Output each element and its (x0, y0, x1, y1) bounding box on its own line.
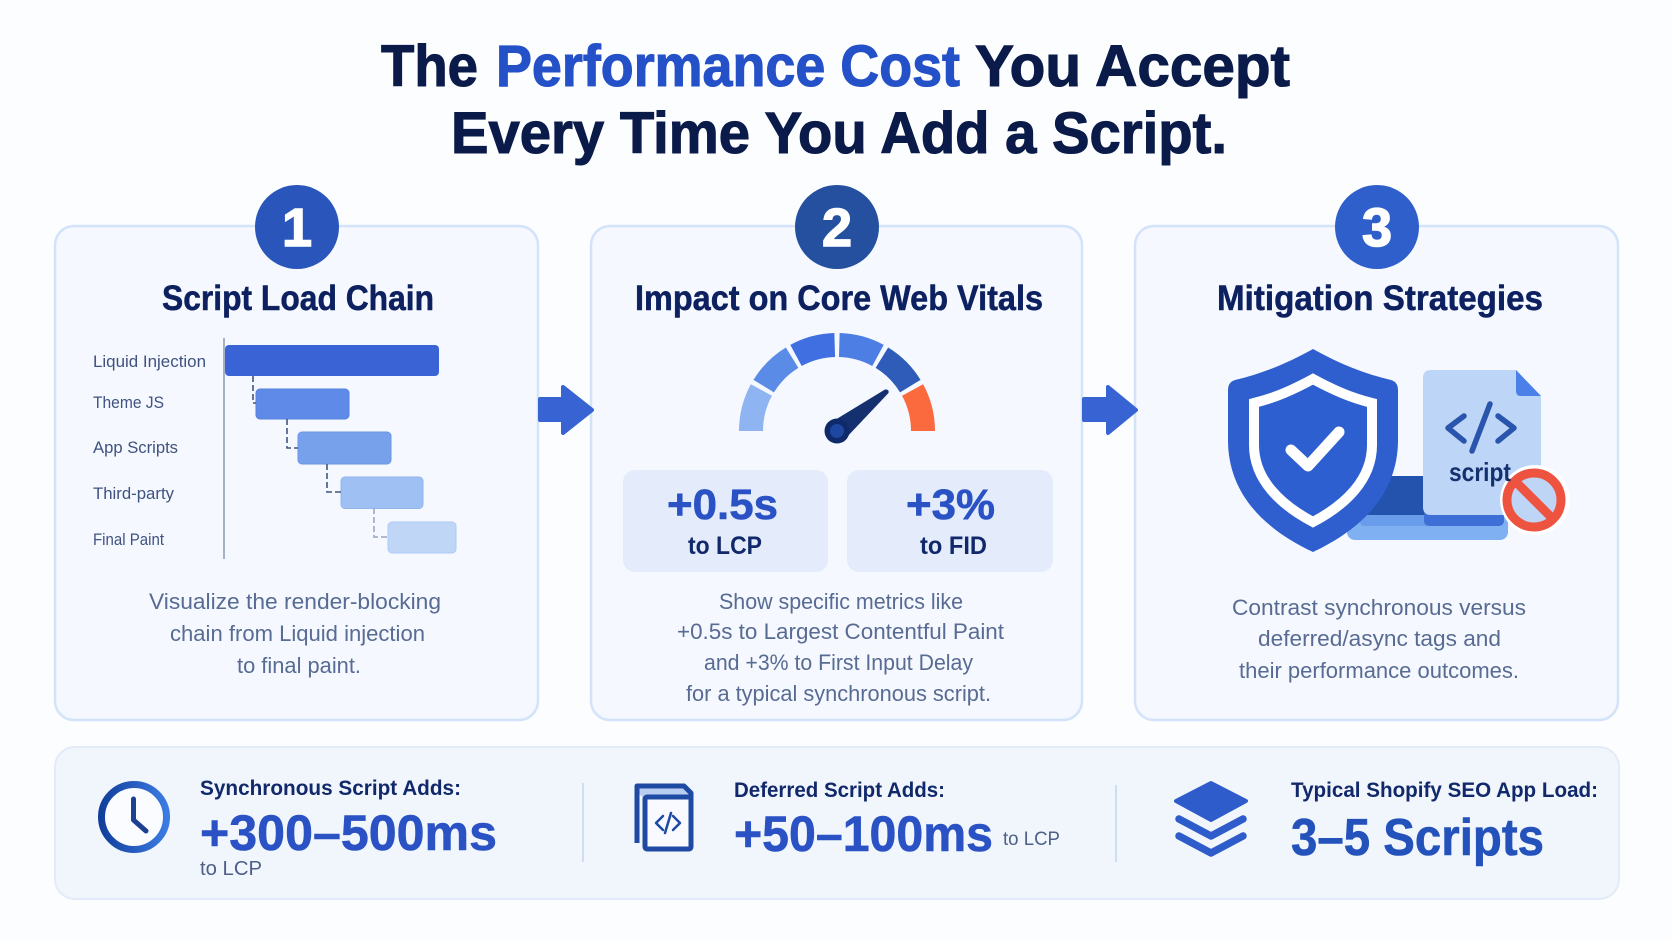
stat: synchronous script (102, 777, 497, 880)
label: script: script (1449, 457, 1511, 487)
stat box: FID: to FID (920, 532, 987, 560)
gauge (751, 345, 923, 444)
stat box: LCP: +0.5s (667, 481, 778, 529)
gantt chart: App Scripts (93, 439, 178, 457)
step number 2 (795, 185, 879, 269)
stat box: LCP: to LCP (688, 532, 762, 560)
stat: deferred script: +50–100ms (734, 806, 993, 862)
summary bar (55, 747, 1619, 899)
icon: shield with check (1228, 349, 1398, 552)
description: core web vitals: and +3% to First Input Delay (704, 650, 974, 675)
description: mitigation strategies: their performance outcomes. (1239, 658, 1519, 683)
description: core web vitals: for a typical synchronous script. (686, 681, 991, 706)
icon: clock (102, 784, 166, 850)
heading: impact on core web vitals: Impact on Core Web Vitals (635, 279, 1043, 318)
description: script load chain: to final paint. (237, 653, 361, 678)
stat: synchronous script: to LCP (200, 858, 262, 880)
panel: script load chain (55, 185, 538, 720)
panel: mitigation strategies (1135, 185, 1618, 720)
title: Performance Cost (496, 34, 960, 99)
description: script load chain (149, 589, 441, 678)
panel: core web vitals (591, 185, 1082, 720)
stat box: LCP (623, 470, 828, 572)
title: You Accept (975, 34, 1290, 99)
arrow: step 1 to step 2 (540, 387, 592, 433)
gantt chart: Final Paint (93, 531, 164, 549)
stat box: FID (847, 470, 1053, 572)
icon: code document (637, 786, 691, 849)
heading: script load chain: Script Load Chain (162, 279, 434, 318)
gantt chart: Third-party (93, 485, 175, 503)
description: script load chain: Visualize the render-blocking (149, 589, 441, 614)
step number 1 (255, 185, 339, 269)
description: core web vitals (677, 589, 1005, 706)
step number 3: 3 (1362, 198, 1392, 258)
description: mitigation strategies: deferred/async tags and (1258, 626, 1501, 651)
gantt chart: Liquid Injection (93, 353, 206, 371)
stat: SEO app load: 3–5 Scripts (1291, 809, 1544, 867)
stat: synchronous script: +300–500ms (200, 805, 497, 861)
step number 3 (1335, 185, 1419, 269)
step number 1: 1 (282, 198, 312, 258)
description: mitigation strategies: Contrast synchronous versus (1232, 595, 1526, 620)
stat: SEO app load (1176, 779, 1598, 867)
stat box: FID: +3% (906, 481, 995, 529)
stat: synchronous script: Synchronous Script Adds: (200, 777, 461, 800)
stat: SEO app load: Typical Shopify SEO App Load: (1291, 779, 1598, 802)
icon: blocked sign (1500, 465, 1570, 535)
step number 2: 2 (822, 198, 852, 258)
description: core web vitals: +0.5s to Largest Contentful Paint (677, 619, 1005, 644)
gantt chart: Theme JS (93, 394, 164, 412)
stat: deferred script: to LCP (1003, 829, 1060, 850)
illustration: laptop with script document (1345, 370, 1541, 540)
title (381, 34, 1290, 166)
title: The (381, 34, 478, 99)
arrow: step 2 to step 3 (1084, 387, 1136, 433)
description: mitigation strategies (1232, 595, 1526, 683)
gantt chart (93, 338, 456, 559)
title: Every Time You Add a Script. (451, 101, 1227, 166)
icon: layers (1176, 783, 1246, 853)
stat: deferred script (637, 779, 1060, 862)
description: script load chain: chain from Liquid injection (170, 621, 425, 646)
description: core web vitals: Show specific metrics like (719, 589, 963, 614)
heading: mitigation strategies: Mitigation Strategies (1217, 279, 1543, 318)
stat: deferred script: Deferred Script Adds: (734, 779, 945, 802)
